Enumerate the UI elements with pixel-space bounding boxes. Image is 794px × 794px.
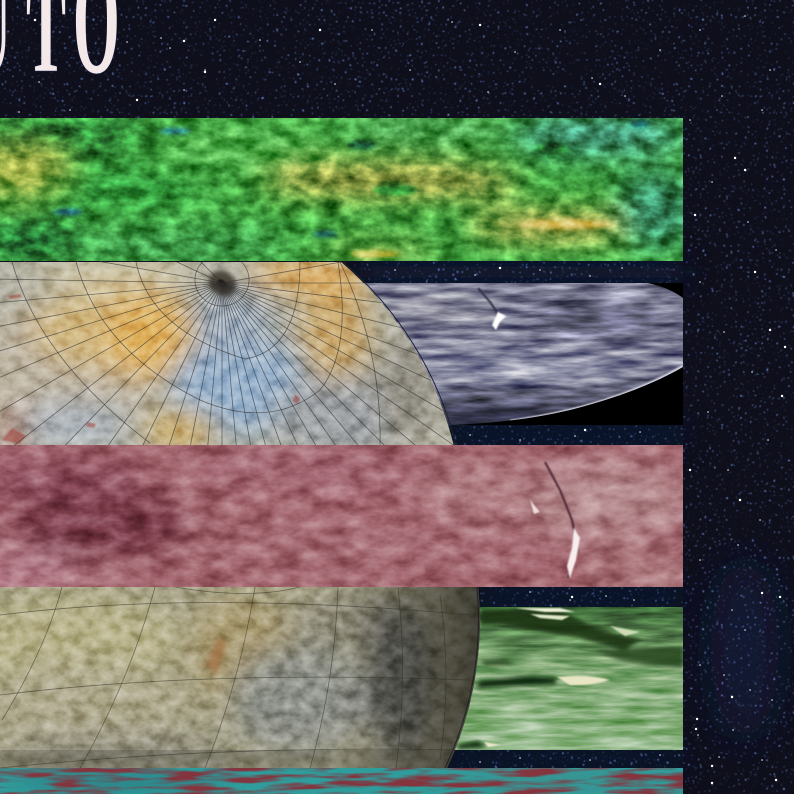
panel: teal striped band	[0, 768, 683, 794]
second globe grid lines	[0, 587, 470, 768]
panel: second globe with grid	[0, 587, 500, 768]
title	[0, 0, 120, 106]
panel: green valley photo	[450, 607, 683, 750]
globe grid lines	[0, 262, 454, 445]
panel: green terrain band	[0, 113, 695, 261]
panel: pink terrain band	[0, 445, 700, 588]
panel: polar globe with grid	[0, 262, 456, 445]
panel: grey planet limb photo	[360, 283, 683, 430]
